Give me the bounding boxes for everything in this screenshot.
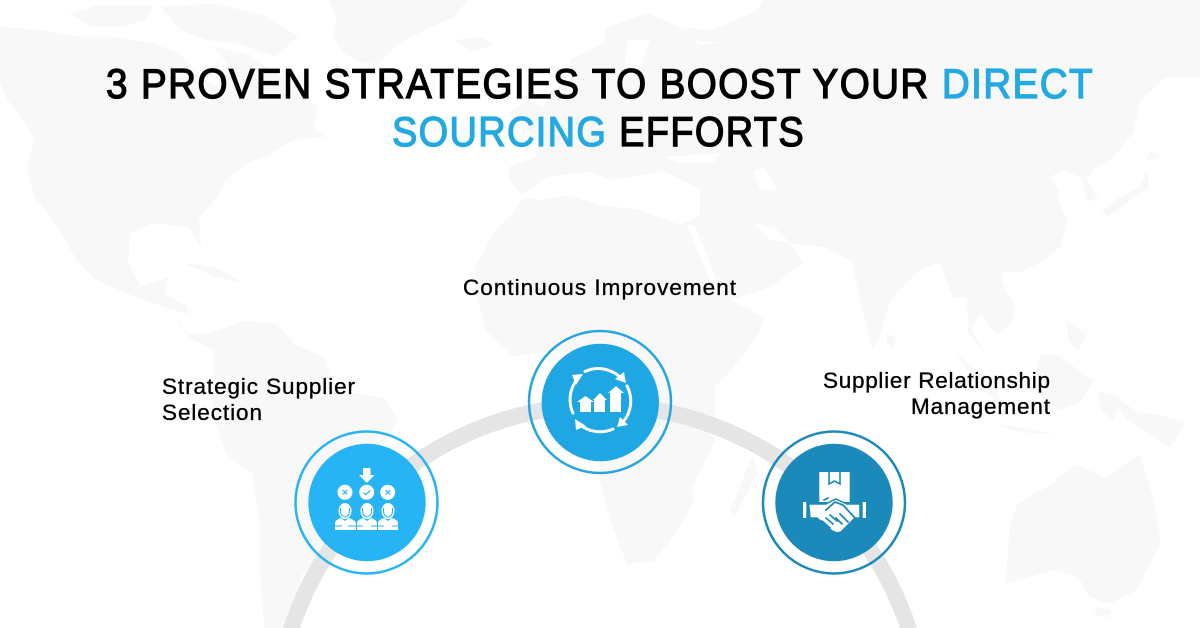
label: supplier relationship management: Management: [911, 394, 1051, 419]
icon: handshake with box: [803, 472, 866, 533]
title: 3 PROVEN STRATEGIES TO BOOST YOUR DIRECT: [106, 60, 1094, 107]
label: strategic supplier selection: Strategic Supplier: [162, 374, 356, 399]
title: [106, 60, 1094, 155]
node: strategic supplier selection: [296, 432, 438, 574]
label: supplier relationship management: Supplier Relationship: [823, 368, 1050, 393]
connecting arc: [283, 397, 917, 628]
label: strategic supplier selection: Selection: [162, 400, 262, 425]
label: strategic supplier selection: [162, 374, 356, 425]
seas: [518, 40, 790, 295]
title: SOURCING EFFORTS: [392, 108, 805, 155]
label: supplier relationship management: [823, 368, 1051, 419]
node: supplier relationship management: [763, 432, 905, 574]
icon: growth cycle: [570, 369, 631, 432]
eurasia and africa: [475, 0, 1200, 564]
icon: candidates selection: [335, 468, 398, 530]
label: continuous improvement: Continuous Improvement: [463, 275, 737, 300]
node: continuous improvement: [529, 331, 671, 473]
